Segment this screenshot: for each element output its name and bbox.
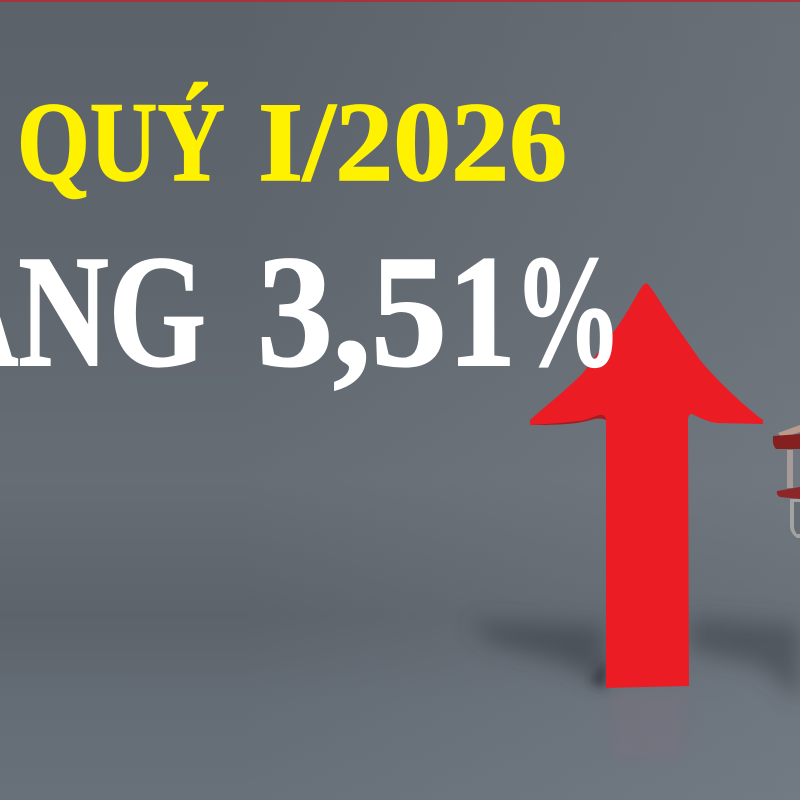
heading: white growth figure xyxy=(0,222,622,400)
heading: yellow period label xyxy=(17,80,567,205)
icon: red up arrow xyxy=(530,283,763,688)
arrow ground shadow xyxy=(470,618,800,760)
icon: house model at right edge xyxy=(773,425,800,538)
heading: white growth figure: 1 xyxy=(448,222,516,400)
heading: white growth figure: % xyxy=(514,222,622,400)
heading: yellow period label: QUÝ xyxy=(17,80,225,205)
heading: yellow period label: I/2026 xyxy=(258,80,567,205)
heading: white growth figure: 3,5 xyxy=(257,222,447,400)
top red stripe xyxy=(0,0,800,2)
